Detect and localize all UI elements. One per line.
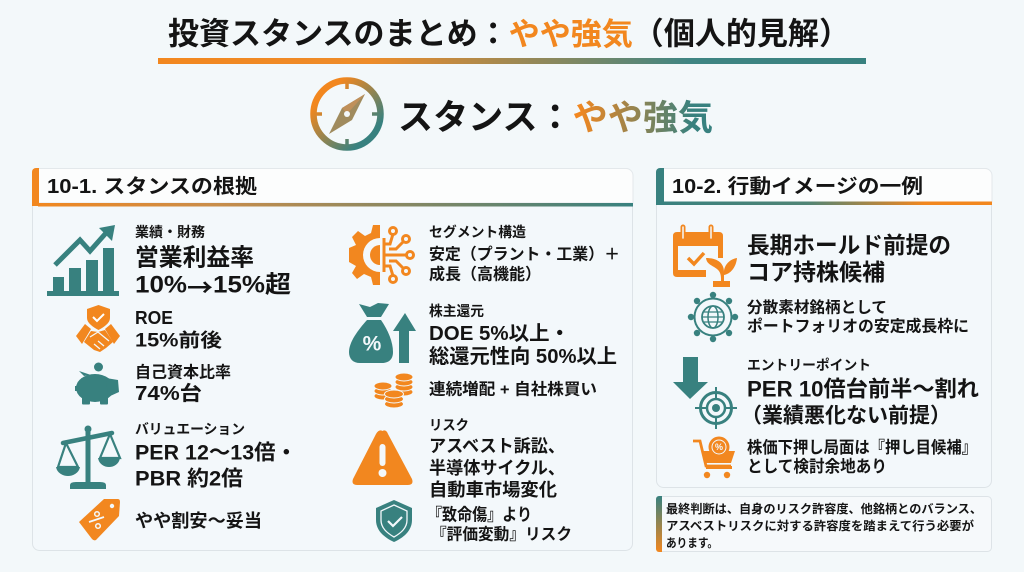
text: ROE: 15%前後 — [135, 330, 222, 352]
text: ROE — [135, 308, 222, 352]
text: valuation risk — [427, 506, 572, 544]
callout: final judgement note: 最終判断は、自身のリスク許容度、他銘柄とのバランス、 — [666, 501, 982, 516]
text: segment — [429, 224, 620, 284]
text: equity ratio: 自己資本比率 — [135, 362, 231, 382]
heading: 10-1: 10-1. スタンスの根拠 — [47, 175, 257, 198]
panel: 10-1 stance rationale — [32, 168, 633, 550]
text: earnings: 10%→15%超 — [135, 268, 291, 302]
text: earnings: 業績・財務 — [135, 224, 205, 240]
text: long-term hold: 長期ホールド前提の — [747, 232, 951, 258]
callout: final judgement note — [656, 496, 992, 552]
text: risk: 自動車市場変化 — [429, 480, 557, 500]
text: buy on dips: として検討余地あり — [747, 457, 887, 476]
text: equity ratio: 74%台 — [135, 382, 202, 405]
text: segment: 成長（高機能） — [429, 264, 541, 284]
text: valuation — [135, 421, 297, 490]
stance banner — [314, 80, 713, 148]
icon: balance scales — [56, 426, 120, 489]
icon: shopping cart: % — [715, 442, 723, 452]
heading: 10-1 — [32, 168, 633, 206]
text: long-term hold: コア持株候補 — [747, 259, 885, 285]
text: segment: セグメント構造 — [429, 224, 526, 240]
text: shareholder returns — [429, 303, 617, 368]
text: earnings: 営業利益率 — [135, 244, 254, 272]
text: entry point: （業績悪化ない前提） — [741, 404, 951, 428]
text: dividends and buybacks: 連続増配 + 自社株買い — [429, 380, 597, 398]
text: buy on dips — [747, 438, 977, 476]
text: valuation risk: 『致命傷』より — [427, 506, 532, 524]
text: risk — [429, 417, 565, 500]
icon: compass — [314, 80, 380, 148]
icon: shield check — [376, 500, 412, 542]
icon: down arrow and target — [673, 357, 737, 429]
icon: money bag and up arrow: % — [363, 332, 382, 356]
callout: final judgement note: アスベストリスクに対する許容度を踏まえて行う必要が — [666, 518, 974, 533]
icon: coins — [374, 373, 413, 408]
text: valuation: PER 12～13倍・ — [135, 442, 297, 464]
text: valuation: PBR 約2倍 — [135, 468, 243, 490]
text: buy on dips: 株価下押し局面は『押し目候補』 — [747, 438, 977, 457]
text: segment: 安定（プラント・工業）＋ — [429, 244, 620, 264]
text: earnings — [135, 224, 291, 302]
text: ROE: ROE — [135, 308, 173, 328]
icon: shopping cart — [693, 436, 735, 478]
text: equity ratio — [135, 362, 231, 405]
icon: discount tag — [79, 499, 120, 540]
text: risk: 半導体サイクル、 — [429, 458, 565, 478]
text: long-term hold — [747, 232, 951, 285]
heading: 10-2 — [656, 168, 992, 205]
icon: warning triangle — [352, 430, 412, 485]
text: slightly undervalued: やや割安～妥当 — [135, 511, 262, 531]
heading: 10-2: 10-2. 行動イメージの一例 — [672, 175, 923, 198]
text: valuation: バリュエーション — [135, 421, 245, 437]
icon: calendar and sprout — [673, 227, 737, 287]
text: diversified materials: ポートフォリオの安定成長枠に — [747, 316, 969, 336]
callout: final judgement note: あります。 — [666, 536, 718, 550]
stance text: スタンス：やや強気 — [398, 98, 713, 138]
icon: money bag and up arrow — [349, 303, 416, 363]
icon: growth chart — [47, 225, 119, 296]
icon: shield and handshake — [76, 305, 120, 352]
text: entry point — [741, 357, 979, 428]
text: shareholder returns: 株主還元 — [429, 303, 484, 319]
text: shareholder returns: 総還元性向 50%以上 — [429, 345, 617, 368]
text: risk: アスベスト訴訟、 — [429, 436, 565, 456]
text: risk: リスク — [429, 417, 469, 433]
text: diversified materials: 分散素材銘柄として — [747, 298, 887, 316]
text: shareholder returns: DOE 5%以上・ — [429, 322, 570, 345]
icon: piggy bank — [75, 362, 119, 404]
text: diversified materials — [747, 298, 969, 336]
text: entry point: PER 10倍台前半～割れ — [747, 376, 979, 402]
icon: globe network — [688, 292, 738, 342]
title: 投資スタンスのまとめ：やや強気（個人的見解） — [168, 16, 850, 52]
icon: gear and circuit — [349, 225, 414, 285]
text: valuation risk: 『評価変動』リスク — [431, 524, 572, 544]
panel: 10-2 action image — [656, 168, 992, 488]
text: entry point: エントリーポイント — [747, 357, 871, 373]
